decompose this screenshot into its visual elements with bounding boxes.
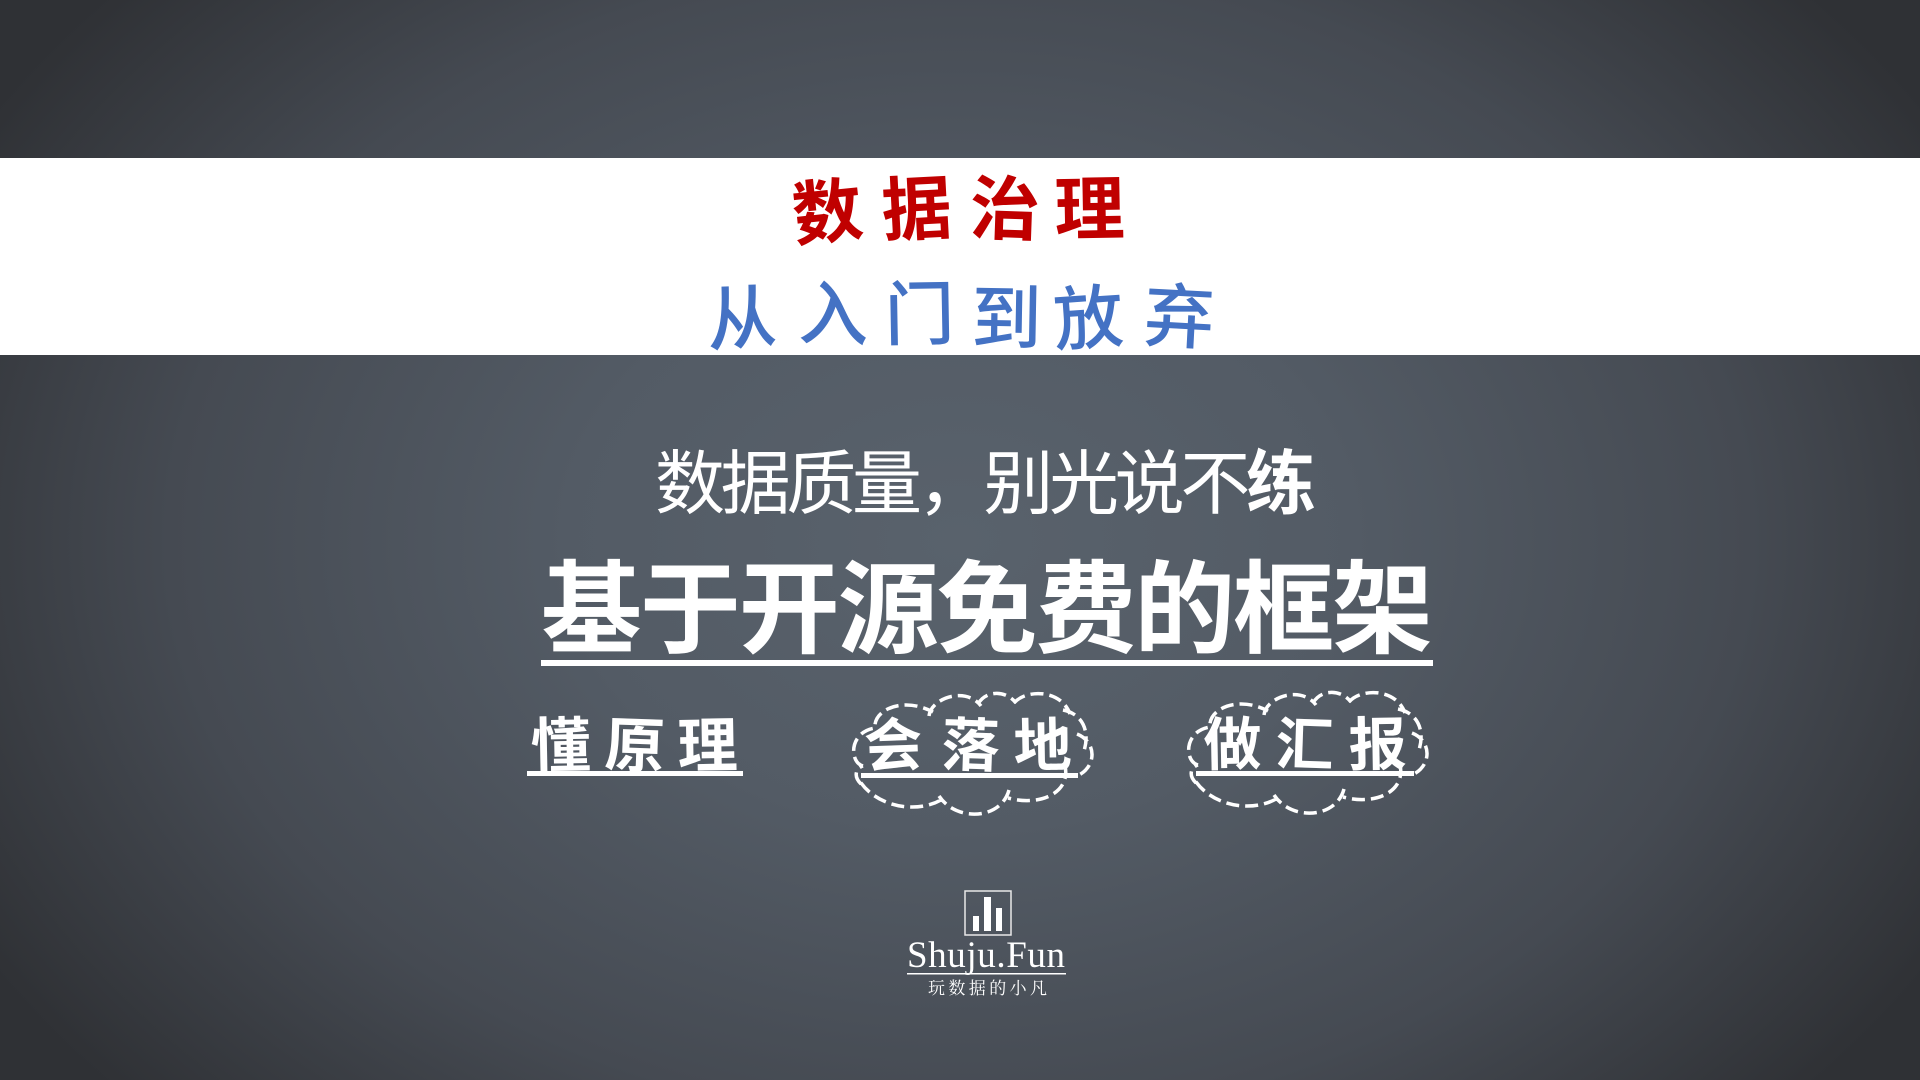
cloud outline	[1189, 692, 1427, 813]
item: 做汇报: 汇	[1275, 712, 1335, 779]
title band	[0, 158, 1920, 355]
item: 懂原理	[527, 712, 743, 781]
title: red line: 治	[968, 170, 1041, 250]
item: 会落地: 地	[1013, 714, 1072, 780]
item: 会落地: 会	[863, 713, 923, 780]
main heading: 基于开源免费的框架	[541, 555, 1433, 667]
subtitle: blue line: 弃	[1142, 277, 1216, 359]
headline: 数据质量，别光说不练	[655, 445, 1316, 523]
icon: bar chart box	[965, 891, 1011, 935]
subtitle: blue line: 门	[884, 275, 955, 355]
subtitle: blue line: 从	[704, 278, 779, 360]
title: red line: 理	[1054, 170, 1125, 250]
title: red line: 据	[880, 169, 954, 251]
item: 会落地	[854, 693, 1092, 814]
logo	[907, 891, 1066, 998]
item: 懂原理: 懂	[530, 712, 591, 781]
item: 做汇报	[1189, 692, 1427, 813]
subtitle: blue line: 入	[797, 275, 870, 355]
item: 懂原理: 理	[677, 712, 738, 781]
item: 懂原理: 原	[604, 712, 666, 781]
cloud outline	[854, 693, 1092, 814]
logo tagline: 玩数据的小凡	[928, 979, 1047, 998]
logo wordmark: Shuju.Fun	[907, 935, 1065, 976]
subtitle: blue line	[704, 275, 1216, 360]
item: 会落地: 落	[941, 713, 1001, 780]
item: 做汇报: 报	[1348, 713, 1407, 779]
title: red line: 数	[789, 171, 866, 256]
subtitle: blue line: 到	[971, 279, 1042, 359]
item: 做汇报: 做	[1203, 713, 1262, 779]
subtitle: blue line: 放	[1051, 278, 1126, 360]
title: red line	[789, 169, 1125, 256]
